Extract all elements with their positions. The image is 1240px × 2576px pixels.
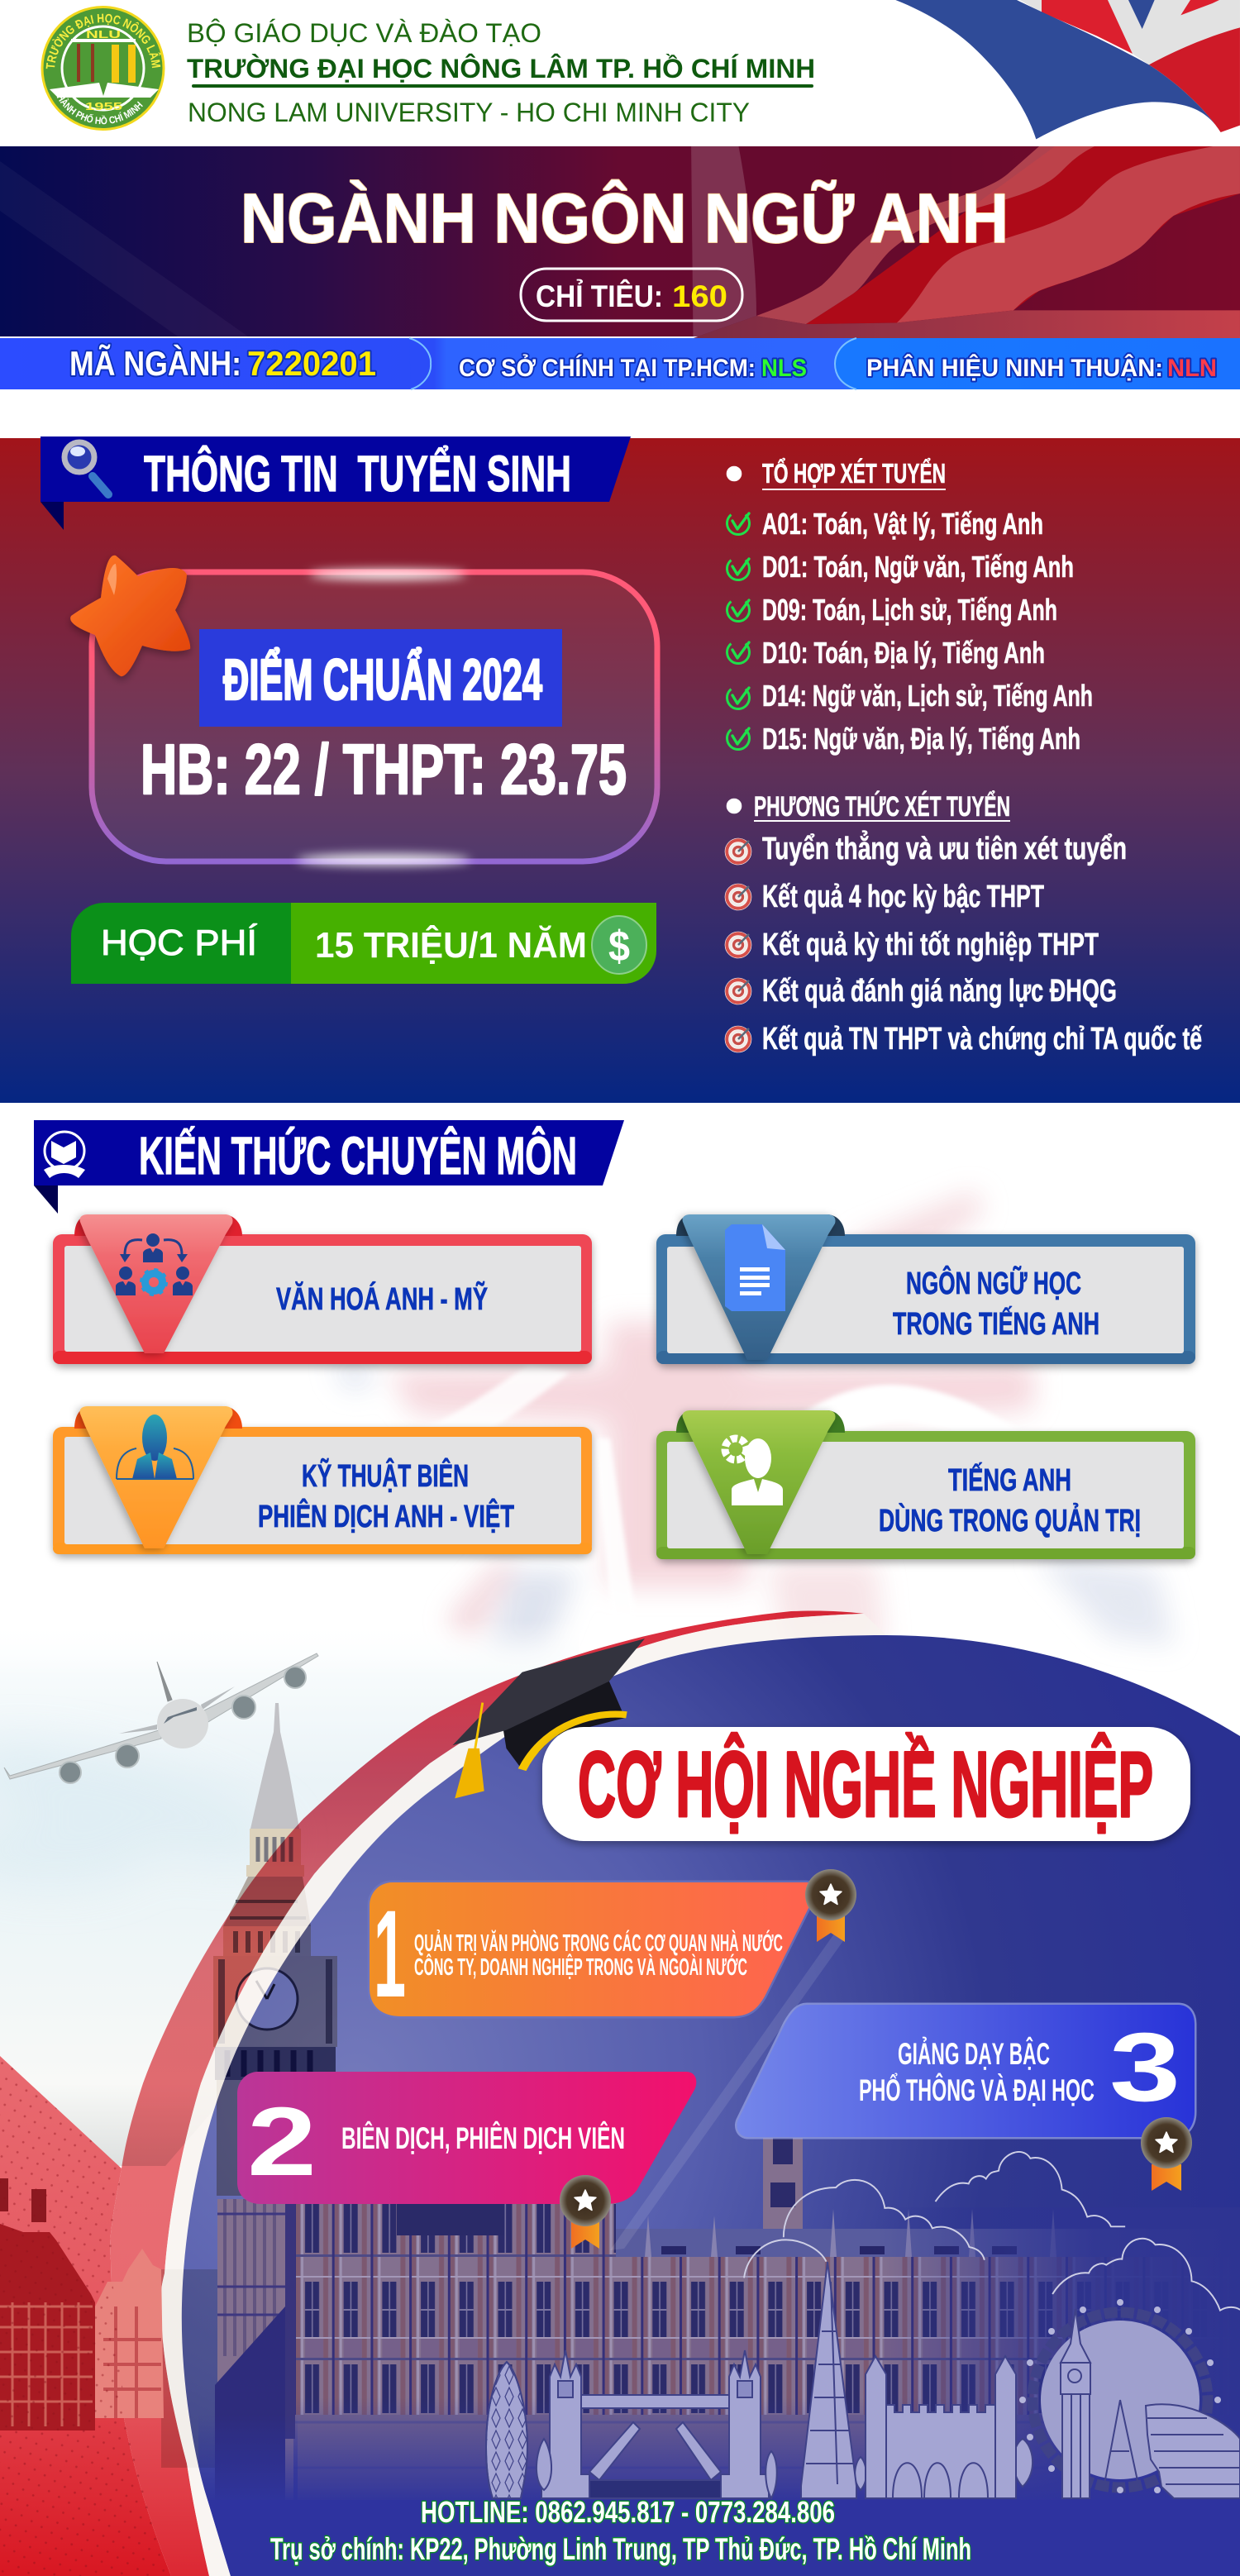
- label: PHIÊN DỊCH ANH - VIỆT: [258, 1498, 514, 1534]
- main campus: NLS: [761, 355, 807, 382]
- sky: [0, 1620, 579, 2166]
- score label: [199, 629, 562, 727]
- career card 3: [737, 2005, 1195, 2191]
- footer contact: HOTLINE: 0862.945.817 - 0773.284.806: [421, 2495, 835, 2529]
- London Eye: [1019, 2299, 1221, 2493]
- icon: flag corner: [895, 0, 1240, 139]
- score label: ĐIỂM CHUẨN 2024: [223, 646, 542, 712]
- illustration: clock tower upper: [213, 1703, 337, 2196]
- icon: dollar: $: [608, 923, 630, 971]
- card: translation and interpreting skills: [53, 1406, 592, 1554]
- illustration: clock tower lower: [198, 2199, 298, 2500]
- illustration: parliament: [293, 2138, 1240, 2505]
- red foreground: [0, 2056, 171, 2576]
- label: [879, 1462, 1141, 1538]
- score values: HB: 22 / THPT: 23.75: [141, 731, 627, 809]
- red arc: [110, 1610, 864, 2576]
- list: subject combinations: [723, 458, 1093, 756]
- mini clock tower: [1061, 2309, 1090, 2498]
- item: D01: D01: Toán, Ngữ văn, Tiếng Anh: [762, 550, 1074, 584]
- icon: university logo: NLU: [86, 28, 121, 41]
- label: VĂN HOÁ ANH - MỸ: [276, 1281, 488, 1317]
- icon: document: [725, 1224, 785, 1311]
- card: linguistics: [656, 1214, 1195, 1364]
- major code: [69, 344, 376, 383]
- career card 1: [370, 1869, 856, 2023]
- icon: university logo: THÀNH PHỐ HỒ CHÍ MINH: [56, 97, 143, 124]
- heading: english name: NONG LAM UNIVERSITY - HO CHI MINH CITY: [188, 98, 750, 127]
- career card 1: 1: [374, 1884, 406, 2023]
- label: TRONG TIẾNG ANH: [893, 1305, 1099, 1342]
- item: D15: D15: Ngữ văn, Địa lý, Tiếng Anh: [762, 722, 1080, 756]
- method 3: [725, 928, 1099, 962]
- icon: dollar: [592, 916, 646, 974]
- label: KỸ THUẬT BIÊN: [302, 1457, 469, 1494]
- blue circle: [182, 1635, 1240, 2576]
- branch campus: NLN: [1167, 355, 1217, 382]
- major code: MÃ NGÀNH:: [69, 344, 241, 383]
- icon: team: [116, 1233, 193, 1295]
- heading: university name: TRƯỜNG ĐẠI HỌC NÔNG LÂM TP. HỒ CHÍ MINH: [187, 54, 815, 83]
- info strip: codes: [0, 338, 1240, 389]
- icon: star: [70, 556, 190, 676]
- main campus: CƠ SỞ CHÍNH TẠI TP.HCM:: [459, 354, 756, 382]
- quota pill: 160: [672, 279, 727, 313]
- tower bridge: [541, 2350, 769, 2498]
- quota pill: CHỈ TIÊU:: [536, 279, 663, 313]
- method 4: [725, 974, 1117, 1009]
- item: D10: [723, 636, 1045, 670]
- label: [893, 1264, 1099, 1342]
- pale building: [161, 2269, 219, 2468]
- tuition bar: HỌC PHÍ: [101, 923, 258, 963]
- item: D14: D14: Ngữ văn, Lịch sử, Tiếng Anh: [762, 679, 1093, 713]
- illustration: red buildings: [0, 2178, 164, 2431]
- item: D10: D10: Toán, Địa lý, Tiếng Anh: [762, 636, 1045, 670]
- icon: university logo: TRƯỜNG ĐẠI HỌC NÔNG LÂM: [46, 13, 160, 69]
- white ring: [160, 1614, 886, 2576]
- icon: university logo: 1955: [85, 100, 122, 112]
- branch campus: PHÂN HIỆU NINH THUẬN:: [866, 354, 1163, 382]
- badge: [1141, 2117, 1192, 2191]
- section heading: admissions: [41, 436, 631, 530]
- icon: manager: [725, 1438, 783, 1505]
- tuition bar: 15 TRIỆU/1 NĂM: [315, 924, 587, 966]
- icon: university logo: [41, 6, 165, 131]
- quota pill: [521, 269, 742, 321]
- major code: 7220201: [247, 344, 376, 383]
- career card 2: BIÊN DỊCH, PHIÊN DỊCH VIÊN: [341, 2120, 625, 2155]
- trees: [537, 2439, 551, 2490]
- icon: book crest: [44, 1132, 85, 1178]
- city hall: [1146, 2404, 1240, 2498]
- card: English for management: [656, 1410, 1195, 1559]
- method 1: Tuyển thẳng và ưu tiên xét tuyển: [762, 829, 1127, 866]
- icon: interpreter: [117, 1414, 193, 1479]
- heading: ministry: BỘ GIÁO DỤC VÀ ĐÀO TẠO: [187, 18, 541, 48]
- item: D14: [723, 679, 1093, 713]
- label: NGÔN NGỮ HỌC: [906, 1264, 1081, 1301]
- light streak: [610, 1930, 845, 2250]
- career card 2: [237, 2072, 696, 2249]
- clouds outline: [744, 2152, 1240, 2311]
- item: D09: D09: Toán, Lịch sử, Tiếng Anh: [762, 593, 1057, 627]
- item: A01: [723, 507, 1043, 541]
- label: [258, 1457, 514, 1534]
- shard: [801, 2262, 856, 2498]
- item: A01: A01: Toán, Vật lý, Tiếng Anh: [762, 507, 1043, 541]
- section heading: specialist knowledge: KIẾN THỨC CHUYÊN MÔN: [139, 1125, 577, 1185]
- item: D01: [723, 550, 1074, 584]
- career card 1: CÔNG TY, DOANH NGHIỆP TRONG VÀ NGOÀI NƯỚC: [414, 1953, 747, 1981]
- gherkin: [486, 2362, 527, 2498]
- career card 3: 3: [1109, 2013, 1180, 2122]
- castle: [866, 2356, 1016, 2498]
- banner: major title: [0, 146, 1240, 338]
- section heading: admissions: THÔNG TIN TUYỂN SINH: [144, 446, 571, 502]
- title: NGÀNH NGÔN NGỮ ANH: [241, 179, 1009, 257]
- method 1: [725, 829, 1127, 866]
- footer band: [182, 2500, 1240, 2576]
- header: university identity: [41, 0, 1240, 139]
- badge: [805, 1869, 856, 1942]
- label: TIẾNG ANH: [948, 1462, 1071, 1498]
- method 3: Kết quả kỳ thi tốt nghiệp THPT: [762, 928, 1099, 962]
- panel: career opportunities scene: [0, 1610, 1240, 2576]
- background: faded union flag: [256, 1190, 1174, 1653]
- career card 3: PHỔ THÔNG VÀ ĐẠI HỌC: [859, 2072, 1095, 2107]
- icon: graduation cap: [452, 1639, 645, 1798]
- item: D15: [723, 722, 1080, 756]
- career card 2: 2: [247, 2087, 317, 2197]
- badge: [560, 2175, 611, 2249]
- item: D09: [723, 593, 1057, 627]
- list: admission methods: [725, 791, 1203, 1057]
- tuition bar: [71, 903, 656, 984]
- method 2: Kết quả 4 học kỳ bậc THPT: [762, 880, 1044, 914]
- career card 3: GIẢNG DẠY BẬC: [898, 2036, 1050, 2071]
- list: subject combinations: TỔ HỢP XÉT TUYỂN: [762, 458, 946, 489]
- callout: cutoff score frame: [70, 556, 657, 866]
- footer contact: [270, 2495, 971, 2566]
- career card 1: QUẢN TRỊ VĂN PHÒNG TRONG CÁC CƠ QUAN NHÀ NƯỚC: [414, 1929, 783, 1957]
- illustration: aeroplane: [4, 1653, 318, 1783]
- skyline illustration: [486, 2262, 1240, 2498]
- card: English-American culture: [53, 1214, 592, 1364]
- panel: admissions information: [0, 436, 1240, 1103]
- section heading: specialist knowledge: [34, 1120, 624, 1214]
- method 2: [725, 880, 1044, 914]
- list: admission methods: PHƯƠNG THỨC XÉT TUYỂN: [754, 791, 1010, 823]
- icon: magnifier: [64, 442, 108, 494]
